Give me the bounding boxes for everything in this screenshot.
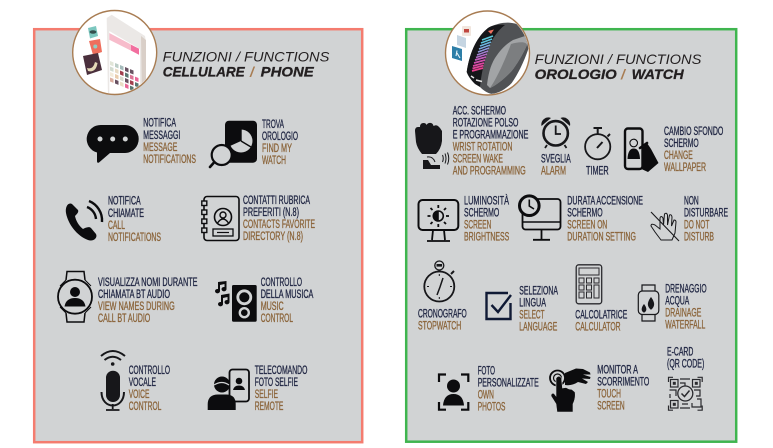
label: TELECOMANDO [255,365,307,377]
label [519,285,558,333]
label [684,195,728,243]
icon: person with phone [208,370,249,410]
label: (QR CODE) [667,359,704,371]
label: PHOTOS [478,402,506,414]
icon: monitor with sun [418,200,458,241]
label: NON [684,195,699,207]
label: CHANGE [664,150,693,162]
icon: watch with magnifier [210,121,257,167]
icon: checkbox [486,293,511,319]
label: MESSAGGI [143,130,180,142]
icon: crossed hand [651,212,679,241]
label: SCHERMO [464,207,499,219]
label [418,308,467,332]
label [597,365,649,413]
label [665,283,707,331]
label [108,196,161,244]
item: call notifications [66,196,161,244]
item: screen brightness [418,194,509,243]
label: FOTO [478,366,495,378]
item: view names during call [58,272,198,325]
label: CONTROL [129,401,162,413]
item: favorite contacts [202,195,315,243]
item: selfie remote [208,365,307,413]
label: DRENAGGIO [665,283,707,295]
item: select language [486,285,558,333]
heading: watch [535,51,702,82]
label: SCHERMO [664,138,699,150]
label [541,153,571,177]
panel: watch functions [406,11,736,442]
label: WRIST ROTATION [453,142,512,154]
label: STOPWATCH [418,320,461,332]
icon: fist with sound waves [415,123,449,169]
item: touch screen [550,365,649,413]
label: TIMER [586,165,609,177]
icon: calculator [576,265,602,304]
label [667,347,704,371]
item: change wallpaper [625,126,723,174]
label: DELLA MUSICA [261,289,314,301]
item: screen on duration [520,195,643,243]
label: LINGUA [519,297,546,309]
item: message notifications [87,118,196,166]
label: DISTURBARE [684,207,728,219]
label: NOTIFICATIONS [108,232,161,244]
label: DISTURB [684,231,714,243]
label: MONITOR A [597,365,638,377]
label: SCHERMO [567,207,603,219]
item: own photos [439,366,539,414]
label: CONTROLLO [129,365,170,377]
badge: phone illustration [73,10,157,100]
heading: phone: FUNZIONI / FUNCTIONS [163,49,330,65]
label [243,195,315,243]
heading: watch: OROLOGIO [535,66,617,82]
heading: phone: PHONE [261,64,314,80]
icon: speech bubble [87,125,139,163]
label: SCORRIMENTO [597,377,649,389]
item: stopwatch [418,261,467,332]
label [575,310,627,334]
label: DIRECTORY (N.8) [243,231,303,243]
item: find my watch [210,119,298,167]
heading: watch: FUNZIONI / FUNCTIONS [535,51,702,67]
label: AND PROGRAMMING [453,166,526,178]
label: SELFIE [255,389,278,401]
badge: smart band illustration [446,11,530,95]
label: CALCOLATRICE [575,310,627,322]
label [567,195,643,243]
label: SCREEN WAKE [453,154,503,166]
label: SELEZIONA [519,285,558,297]
label: DRAINAGE [665,307,701,319]
label: CRONOGRAFO [418,308,467,320]
label: PERSONALIZZATE [478,378,539,390]
label: CONTATTI RUBRICA [243,195,310,207]
item: timer [585,128,610,177]
panel background [34,29,362,442]
label: NOTIFICATIONS [143,154,196,166]
label [255,365,307,413]
label: LANGUAGE [519,321,557,333]
icon: finger tapping wrist [550,368,590,412]
label: SCREEN [597,401,625,413]
item: wrist rotation [415,106,529,178]
label [261,277,314,325]
label [478,366,539,414]
label: REMOTE [255,401,284,413]
heading: watch: / [620,66,627,82]
icon: monitor with clock [520,196,560,240]
label: SCREEN [464,219,491,231]
item: voice control [101,351,170,413]
item: do not disturb [651,195,728,243]
item: e-card [667,347,704,410]
icon: microphone [101,351,125,410]
label: ACQUA [665,295,689,307]
panel background [406,29,736,442]
icon: phone handset [66,201,102,241]
label: CALL BT AUDIO [98,313,150,325]
label: FOTO SELFIE [255,377,298,389]
label: VOICE [129,389,150,401]
icon: stopwatch [424,261,454,302]
label: NOTIFICA [143,118,176,130]
label: ROTAZIONE POLSO [453,118,518,130]
label: VOCALE [129,377,156,389]
label: E PROGRAMMAZIONE [453,130,529,142]
label [262,119,298,167]
label [453,106,529,178]
label: E-CARD [667,347,693,359]
label: CAMBIO SFONDO [664,126,723,138]
label: OWN [478,390,494,402]
label: TOUCH [597,389,621,401]
heading: phone [163,49,330,80]
icon: watch with person [58,272,92,322]
label [664,126,723,174]
icon: watch with drops [638,285,659,321]
item: alarm [541,117,571,177]
label: CALL [108,220,125,232]
label: BRIGHTNESS [464,231,509,243]
label: CONTROL [261,313,293,325]
label: SVEGLIA [541,153,571,165]
label: DURATION SETTING [567,231,636,243]
label: ACC. SCHERMO [453,106,506,118]
icon: timer [585,128,610,159]
label: CALCULATOR [575,322,621,334]
label: CHIAMATE [108,208,144,220]
label: WATERFALL [665,319,706,331]
icon: speaker and notes [215,281,257,322]
label: DO NOT [684,219,709,231]
icon: QR code with check [668,377,702,410]
label: CONTACTS FAVORITE [243,219,315,231]
item: water drainage [638,283,707,331]
label: WATCH [262,155,286,167]
label: FIND MY [262,143,292,155]
label: SELECT [519,309,545,321]
icon: framed portrait [439,374,468,410]
label: SCREEN ON [567,219,607,231]
label: OROLOGIO [262,131,298,143]
label: PREFERITI (N.8) [243,207,299,219]
label: VISUALIZZA NOMI DURANTE [98,277,198,289]
label: VIEW NAMES DURING [98,301,175,313]
heading: watch: WATCH [632,66,685,82]
label: WALLPAPER [664,162,706,174]
icon: alarm clock [541,117,570,148]
label [464,194,509,243]
panel: phone functions [34,10,362,442]
label [129,365,170,413]
label [143,118,196,166]
label: MUSIC [261,301,284,313]
item: music control [215,277,314,325]
label: TROVA [262,119,284,131]
label [98,277,198,325]
heading: phone: CELLULARE [163,64,245,80]
label: NOTIFICA [108,196,141,208]
heading: phone: / [249,64,256,80]
label: LUMINOSITÀ [464,194,509,207]
icon: address book [202,196,239,240]
label: ALARM [541,165,566,177]
label: DURATA ACCENSIONE [567,195,643,207]
label: CONTROLLO [261,277,302,289]
label: CHIAMATA BT AUDIO [98,289,170,301]
icon: hand holding phone [625,128,658,172]
label: MESSAGE [143,142,177,154]
item: calculator [575,265,627,334]
